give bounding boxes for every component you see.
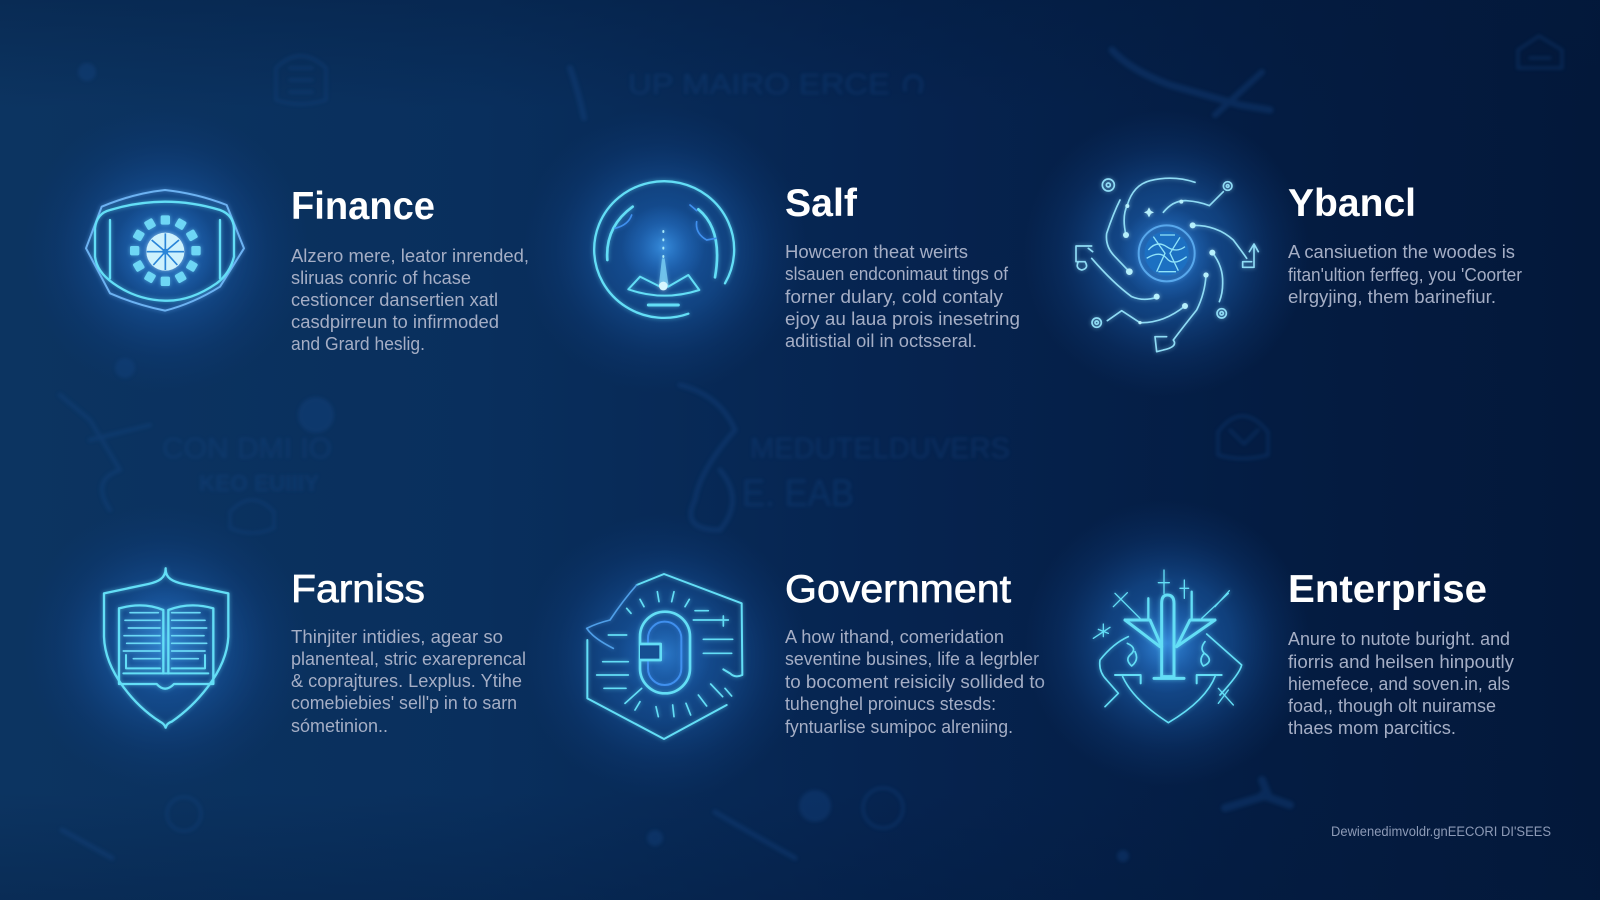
faint background watermarks: UP MAIRO ERCE	[628, 69, 890, 101]
text block: salf description: aditistial oil in octsseral.	[785, 331, 977, 351]
faint background watermarks: E. EAB	[742, 473, 854, 515]
text block: farniss description: comebiebies' sell'p in to sarn	[291, 693, 517, 713]
text block: government description: A how ithand, comeridation	[785, 627, 1004, 647]
text block: salf description: forner dulary, cold contaly	[785, 287, 1003, 307]
text block: ybancl description: fitan'ultion ferffeg, you 'Coorter	[1288, 265, 1522, 285]
text block: finance description: casdpirreun to infirmoded	[291, 312, 499, 332]
text block: enterprise description	[1288, 629, 1514, 738]
panel: salf	[520, 107, 1020, 393]
text block: salf description: Howceron theat weirts	[785, 242, 968, 262]
footer credit: Dewienedimvoldr.gnEECORI DI'SEES	[1331, 824, 1551, 839]
text block: enterprise description: Anure to nutote buright. and	[1288, 629, 1510, 649]
text block: finance description: sliruas conric of hcase	[291, 268, 471, 288]
heading: Farniss: Farniss	[291, 568, 425, 611]
panel: enterprise	[1025, 500, 1514, 787]
heading: Government: Government	[785, 568, 1011, 611]
faint background watermarks: MEDUTELDUVERS	[750, 433, 1010, 465]
text block: salf description: ejoy au laua prois inesetring	[785, 309, 1020, 329]
text block: finance description	[291, 246, 529, 354]
text block: government description: fyntuarlise sumipoc alreniing.	[785, 717, 1013, 737]
text block: finance description: cestioncer dansertien xatl	[291, 290, 498, 310]
text block: farniss description: sómetinion..	[291, 716, 388, 736]
text block: farniss description: Thinjiter intidies, agear so	[291, 627, 503, 647]
text block: enterprise description: foad,, though olt nuiramse	[1288, 696, 1496, 716]
heading: Ybancl: Ybancl	[1288, 182, 1416, 225]
text block: ybancl description: elrgyjing, them barinefiur.	[1288, 287, 1496, 307]
text block: farniss description: & coprajtures. Lexplus. Ytihe	[291, 671, 522, 691]
icon: shield with open book	[22, 503, 308, 790]
text block: finance description: and Grard heslig.	[291, 334, 425, 354]
text block: farniss description	[291, 627, 526, 736]
text block: enterprise description: hiemefece, and soven.in, als	[1288, 674, 1510, 694]
text block: government description	[785, 627, 1045, 737]
panel: farniss	[22, 503, 526, 790]
text block: salf description: slsauen endconimaut tings of	[785, 264, 1009, 284]
text block: ybancl description	[1288, 242, 1522, 307]
text block: government description: to bocoment reisicily sollided to	[785, 672, 1045, 692]
heading: Salf: Salf	[785, 182, 858, 225]
heading: Enterprise: Enterprise	[1288, 568, 1487, 611]
heading: Finance: Finance	[291, 185, 435, 228]
faint background watermarks: CON DMI IO	[162, 433, 332, 465]
text block: salf description	[785, 242, 1020, 351]
text block: finance description: Alzero mere, leator inrended,	[291, 246, 529, 266]
text block: enterprise description: thaes mom parcitics.	[1288, 718, 1456, 738]
icon: finance shield and gear	[22, 107, 308, 393]
icon: salf circle with beacon	[520, 107, 807, 393]
panel: finance	[22, 107, 529, 393]
icon: enterprise tree and hands	[1025, 500, 1312, 787]
text block: government description: seventine busines, life a legrbler	[785, 649, 1039, 669]
icon: network swirl	[1023, 110, 1310, 397]
text block: ybancl description: A cansiuetion the woodes is	[1288, 242, 1515, 262]
icon: government hexagon	[522, 513, 808, 800]
panel: government	[522, 513, 1045, 800]
faint background watermarks: KEO EUIIIY	[199, 470, 319, 496]
text block: government description: tuhenghel proinucs stesds:	[785, 694, 996, 714]
panel: ybancl	[1023, 110, 1522, 397]
text block: farniss description: planenteal, stric exareprencal	[291, 649, 526, 669]
text block: enterprise description: fiorris and heilsen hinpoutly	[1288, 652, 1514, 672]
